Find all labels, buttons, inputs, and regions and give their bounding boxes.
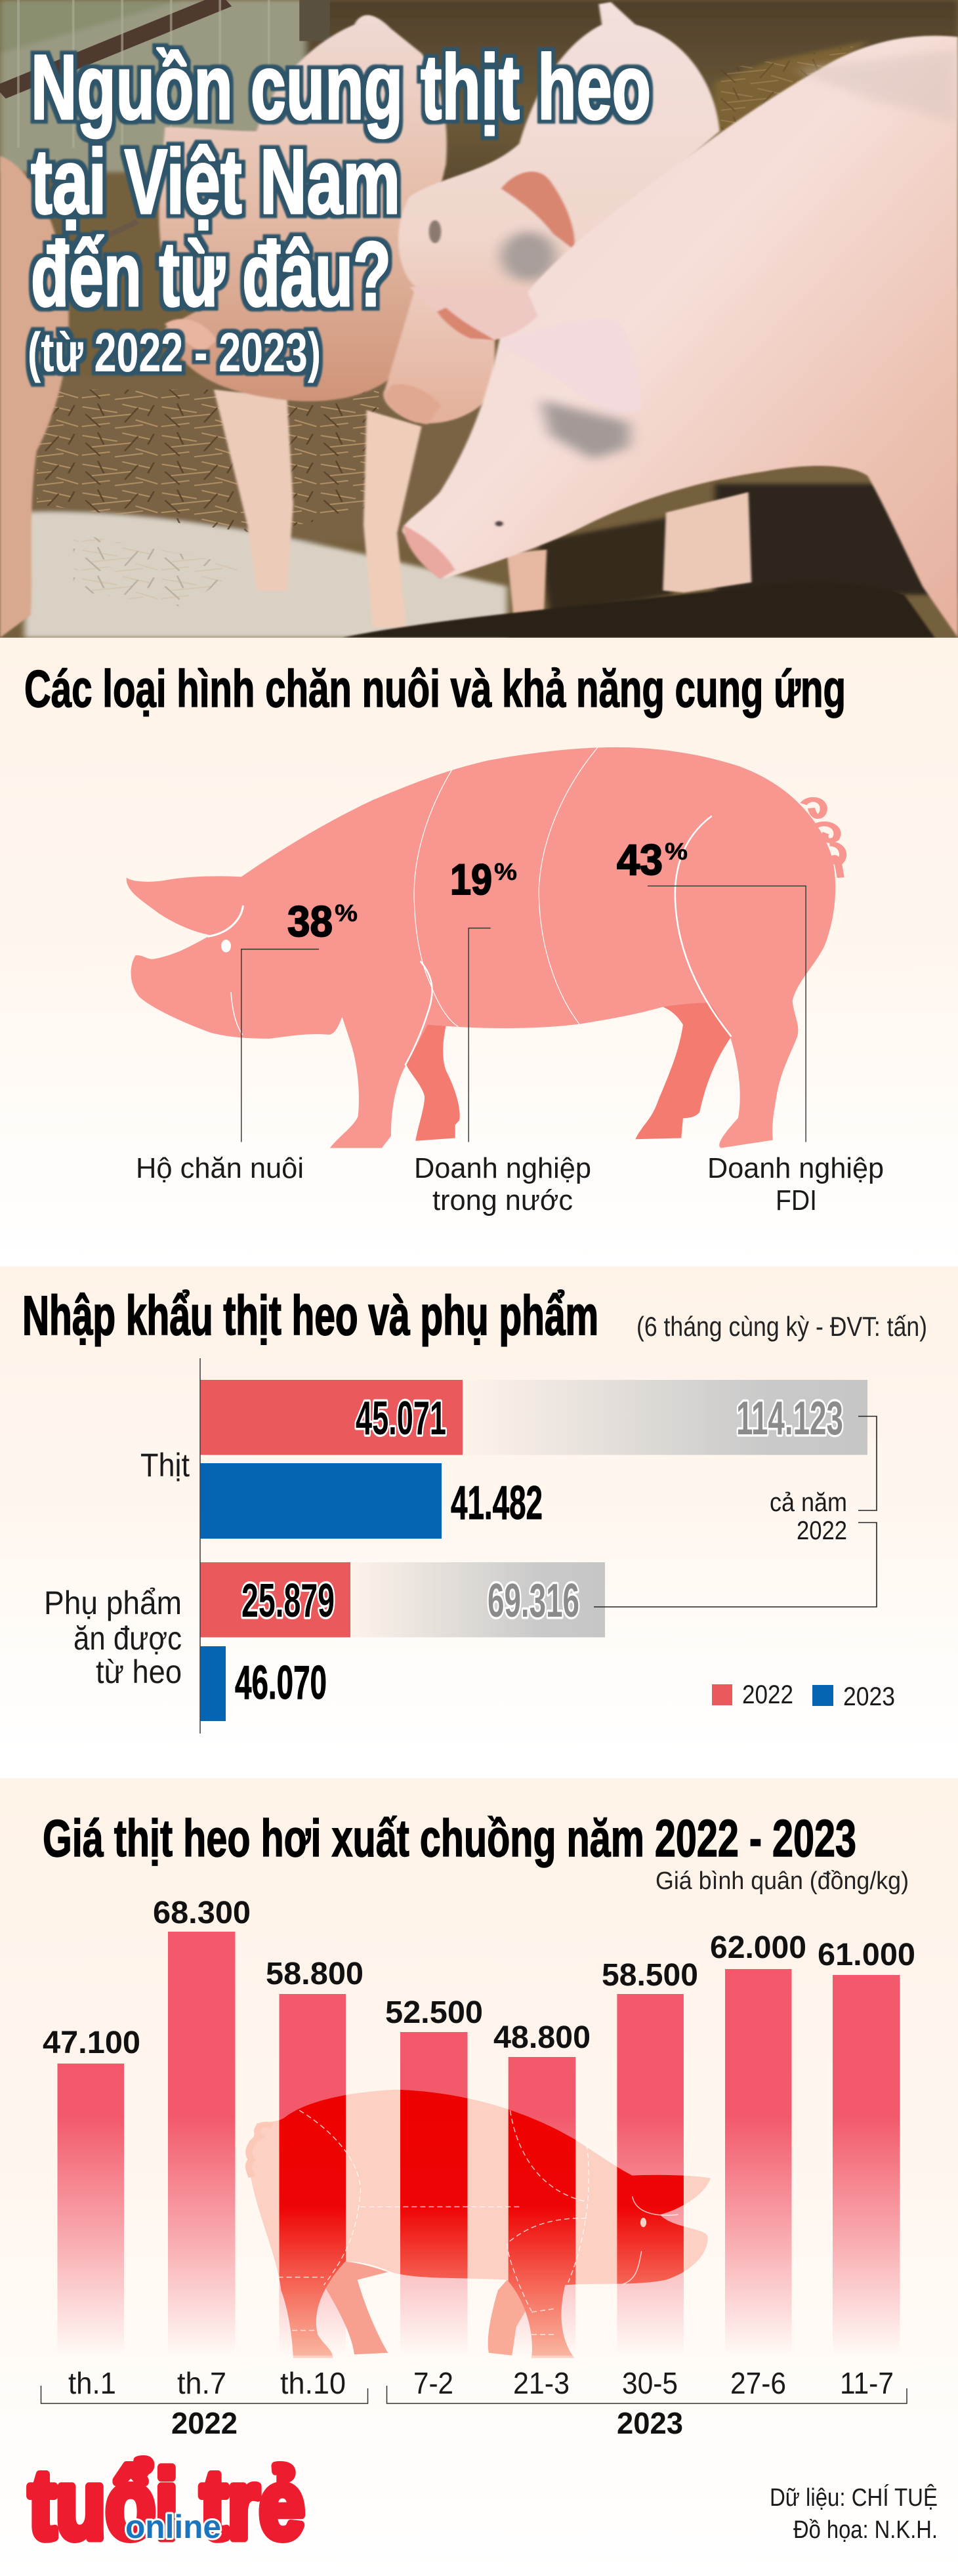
share: 43%: % <box>665 838 688 865</box>
bar values: 62.000 <box>710 1930 806 1965</box>
unit note: Giá bình quân (đồng/kg) <box>656 1867 909 1895</box>
full-year note: 2022 <box>797 1516 847 1545</box>
share: 43%: 43 <box>617 835 663 884</box>
tail <box>803 799 843 878</box>
logo: Tuổi Trẻ Online: online <box>125 2508 221 2545</box>
bar values: 48.800 <box>493 2020 591 2055</box>
bar chart: prices <box>41 1896 915 2440</box>
bar values <box>43 1896 915 2060</box>
label: domestic enterprises <box>414 1152 591 1216</box>
date labels: 11-7 <box>840 2366 894 2400</box>
title: đến từ đâu? <box>31 222 391 325</box>
category labels: Phụ phẩm <box>44 1585 182 1621</box>
back left pig <box>159 15 447 627</box>
panel: pork and by-product imports <box>0 1266 958 1752</box>
label: domestic enterprises: trong nước <box>432 1184 573 1216</box>
label: FDI enterprises <box>707 1152 884 1216</box>
connectors <box>594 1416 877 1607</box>
panel: farming types and supply capacity <box>0 638 958 1263</box>
bar values: 52.500 <box>385 1995 483 2030</box>
date labels <box>68 2366 894 2400</box>
title: Nguồn cung thịt heo <box>31 35 651 138</box>
trough <box>342 582 935 638</box>
bar values: 114.123 <box>736 1392 843 1445</box>
legend: 2022 <box>742 1680 793 1709</box>
bar values: 47.100 <box>43 2025 140 2060</box>
date labels: 21-3 <box>513 2366 570 2400</box>
category labels <box>44 1447 190 1690</box>
year labels <box>171 2406 683 2440</box>
title <box>28 35 651 383</box>
share: 43% <box>617 835 688 884</box>
share: 19%: % <box>494 858 517 885</box>
share: 19%: 19 <box>450 855 492 904</box>
label: domestic enterprises: Doanh nghiệp <box>414 1152 591 1184</box>
date labels: th.7 <box>177 2366 226 2400</box>
date labels: 7-2 <box>413 2366 453 2400</box>
panel: live pig prices <box>0 1778 958 2576</box>
bar values: 45.071 <box>356 1392 446 1445</box>
bar values: 41.482 <box>451 1477 543 1529</box>
year labels: 2023 <box>617 2406 683 2440</box>
behind legs of front pig <box>663 492 751 592</box>
full-year note: cả năm <box>770 1488 847 1517</box>
bar values: 25.879 <box>241 1575 335 1627</box>
date labels: 27-6 <box>730 2366 786 2400</box>
category labels: Thịt <box>140 1447 190 1484</box>
year labels: 2022 <box>171 2406 238 2440</box>
credits: Đồ họa: N.K.H. <box>793 2516 938 2544</box>
category labels: ăn được <box>73 1620 182 1657</box>
heading: Nhập khẩu thịt heo và phụ phẩm <box>22 1285 598 1346</box>
pig silhouette overlay <box>245 2089 711 2358</box>
legend: 2023 <box>843 1682 895 1711</box>
logo: Tuổi Trẻ Online: tuổi trẻ <box>29 2451 304 2559</box>
full-year note <box>770 1488 847 1545</box>
date labels: 30-5 <box>622 2366 678 2400</box>
bar values: 61.000 <box>818 1938 915 1972</box>
bar values: 68.300 <box>153 1896 251 1930</box>
bar values: 69.316 <box>488 1575 579 1627</box>
bar values: 58.800 <box>266 1957 364 1991</box>
credits: Dữ liệu: CHÍ TUỆ <box>770 2483 938 2512</box>
far left pig <box>0 156 69 638</box>
middle pig <box>383 2 720 425</box>
share: 38%: 38 <box>287 897 333 945</box>
date labels: th.1 <box>68 2366 116 2400</box>
bar chart: imports <box>44 1358 895 1734</box>
share: 38%: % <box>335 900 358 926</box>
bar values <box>235 1392 843 1709</box>
year brackets <box>41 2386 907 2403</box>
label: household farming: Hộ chăn nuôi <box>136 1152 304 1184</box>
bar values: 58.500 <box>602 1958 698 1993</box>
date labels: th.10 <box>280 2366 346 2400</box>
label: FDI enterprises: FDI <box>776 1184 817 1216</box>
share: 38% <box>287 897 358 945</box>
title: tại Việt Nam <box>31 130 400 233</box>
photo: pigs at the trough <box>0 0 958 638</box>
front pig <box>402 36 958 638</box>
pig diagram <box>127 747 843 1148</box>
straw <box>37 390 379 533</box>
title: (từ 2022 - 2023) <box>28 322 321 383</box>
label: FDI enterprises: Doanh nghiệp <box>707 1152 884 1184</box>
fence <box>0 0 226 93</box>
credits <box>770 2483 938 2544</box>
leader lines <box>241 886 806 1142</box>
bar values: 46.070 <box>235 1657 327 1709</box>
legend <box>712 1680 895 1711</box>
category labels: từ heo <box>96 1653 182 1690</box>
